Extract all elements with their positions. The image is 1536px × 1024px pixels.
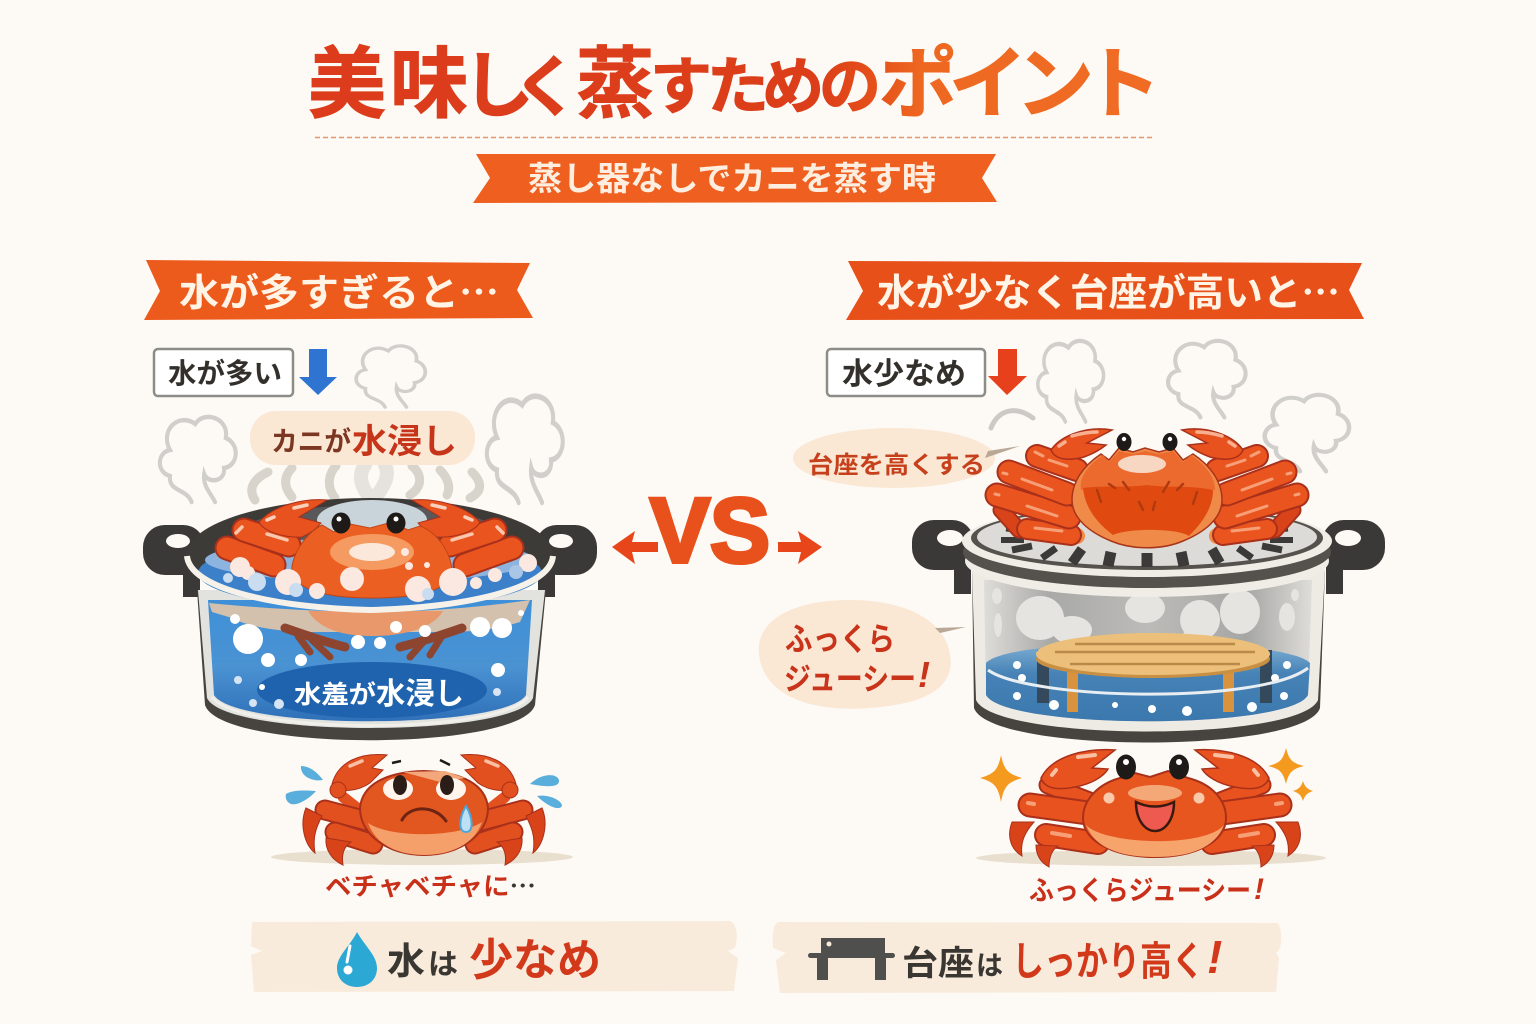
sad crab bbox=[271, 754, 573, 865]
tip band: use little water bbox=[251, 921, 738, 992]
caption: gets soggy: ベチャベチャに … bbox=[325, 867, 536, 903]
steam clouds bbox=[991, 341, 1349, 471]
tip band: use little water: 少なめ bbox=[469, 936, 601, 985]
caption: fluffy and juicy: ふっくらジューシー bbox=[1029, 876, 1251, 906]
subtitle ribbon bbox=[473, 154, 997, 203]
ground shadow bbox=[271, 849, 573, 865]
sad crab eyebrows bbox=[392, 760, 450, 765]
steam clouds bbox=[160, 346, 563, 502]
underwater bubbles bbox=[230, 610, 524, 709]
title: 蒸 bbox=[576, 40, 654, 128]
water line highlight bbox=[988, 668, 1308, 694]
label in water bbox=[294, 678, 464, 711]
title: 美味 bbox=[308, 40, 468, 128]
icon: blue down arrow bbox=[299, 349, 337, 395]
glass body bbox=[972, 570, 1325, 732]
speech bubble: raise the stand: 台座を高くする bbox=[808, 452, 985, 479]
label in water: 水浸し bbox=[376, 678, 464, 711]
tip band: use little water: は bbox=[428, 949, 458, 981]
wooden stand bbox=[1036, 633, 1272, 712]
speech bubble: crab is submerged bbox=[250, 411, 475, 465]
smiling mouth bbox=[1136, 802, 1174, 831]
beige band and submerged body bbox=[209, 600, 530, 632]
happy crab eyes bbox=[1116, 754, 1136, 780]
sweat drops bbox=[286, 766, 562, 808]
tip band: raise the stand: しっかり高く bbox=[1012, 940, 1204, 984]
icon: water drop bbox=[337, 932, 377, 987]
tip band: raise the stand: ! bbox=[1207, 931, 1222, 983]
VS mark with arrows: VS bbox=[650, 480, 770, 582]
label in water: 水羞が bbox=[294, 680, 376, 709]
tear bbox=[460, 806, 472, 832]
label box: little water: 水少なめ bbox=[842, 358, 966, 391]
sad crab body bbox=[360, 771, 488, 855]
pot: elevated crab bbox=[912, 429, 1385, 742]
sparkles bbox=[980, 748, 1313, 802]
title: すための bbox=[650, 53, 881, 122]
pot base bbox=[197, 590, 546, 740]
label box: lots of water bbox=[154, 349, 293, 396]
label box: lots of water: 水が多い bbox=[168, 357, 282, 389]
crab on stand bbox=[995, 429, 1299, 548]
panel: low water high stand bbox=[759, 261, 1385, 993]
shallow water bbox=[986, 643, 1310, 721]
speech bubble: fluffy and juicy: ! bbox=[918, 654, 930, 695]
subtitle ribbon: 蒸し器なしでカニを蒸す時 bbox=[528, 160, 936, 197]
caption: fluffy and juicy: ! bbox=[1254, 873, 1264, 906]
pot base bbox=[972, 570, 1325, 742]
crab in water bbox=[227, 500, 512, 598]
panel: too much water bbox=[143, 260, 738, 992]
title: く bbox=[513, 50, 579, 124]
label box: little water bbox=[827, 349, 985, 396]
speech bubble: crab is submerged: 水浸し bbox=[352, 423, 457, 461]
speech bubble: fluffy and juicy: ふっくら bbox=[785, 621, 895, 657]
pot rim and grate bbox=[962, 505, 1332, 597]
happy crab body bbox=[1083, 771, 1226, 857]
water bubbles bbox=[1013, 661, 1291, 716]
sad crab legs and claws bbox=[303, 754, 545, 865]
tip band: raise the stand: は bbox=[976, 951, 1003, 981]
submerged crab legs bbox=[285, 628, 462, 657]
heading banner: too much water: 水が多すぎると … bbox=[179, 262, 499, 317]
tip band: use little water: 水 bbox=[387, 941, 425, 982]
speech bubble: fluffy and juicy bbox=[759, 600, 966, 709]
tip band: raise the stand: 台座 bbox=[902, 945, 974, 983]
speech bubble: raise the stand bbox=[793, 428, 1020, 488]
frown bbox=[402, 809, 446, 821]
pot: submerged crab bbox=[143, 498, 597, 740]
title: ポイント bbox=[879, 40, 1161, 128]
pot handles bbox=[912, 520, 1385, 594]
pot bottom lip bbox=[212, 697, 528, 726]
VS mark with arrows bbox=[612, 480, 822, 582]
pot interior bbox=[187, 498, 553, 610]
pot front rim bbox=[187, 556, 553, 610]
title: し bbox=[462, 47, 534, 127]
speech bubble: crab is submerged: カニが bbox=[271, 426, 351, 457]
pot handles bbox=[143, 525, 597, 597]
sad crab eyes bbox=[383, 778, 413, 800]
speech bubble: fluffy and juicy: ジューシー bbox=[784, 662, 916, 697]
tip band: raise the stand bbox=[773, 922, 1281, 993]
happy crab legs and claws bbox=[1010, 750, 1300, 867]
water body bbox=[208, 600, 532, 721]
ground shadow bbox=[976, 850, 1326, 866]
icon: stand bbox=[808, 938, 895, 980]
heading banner: low water and high stand: 水が少なく台座が高いと… bbox=[877, 262, 1340, 317]
steam inside pot bbox=[992, 588, 1299, 652]
happy crab bbox=[976, 748, 1326, 867]
foam bubbles bbox=[223, 548, 537, 602]
icon: red down arrow bbox=[988, 349, 1027, 395]
